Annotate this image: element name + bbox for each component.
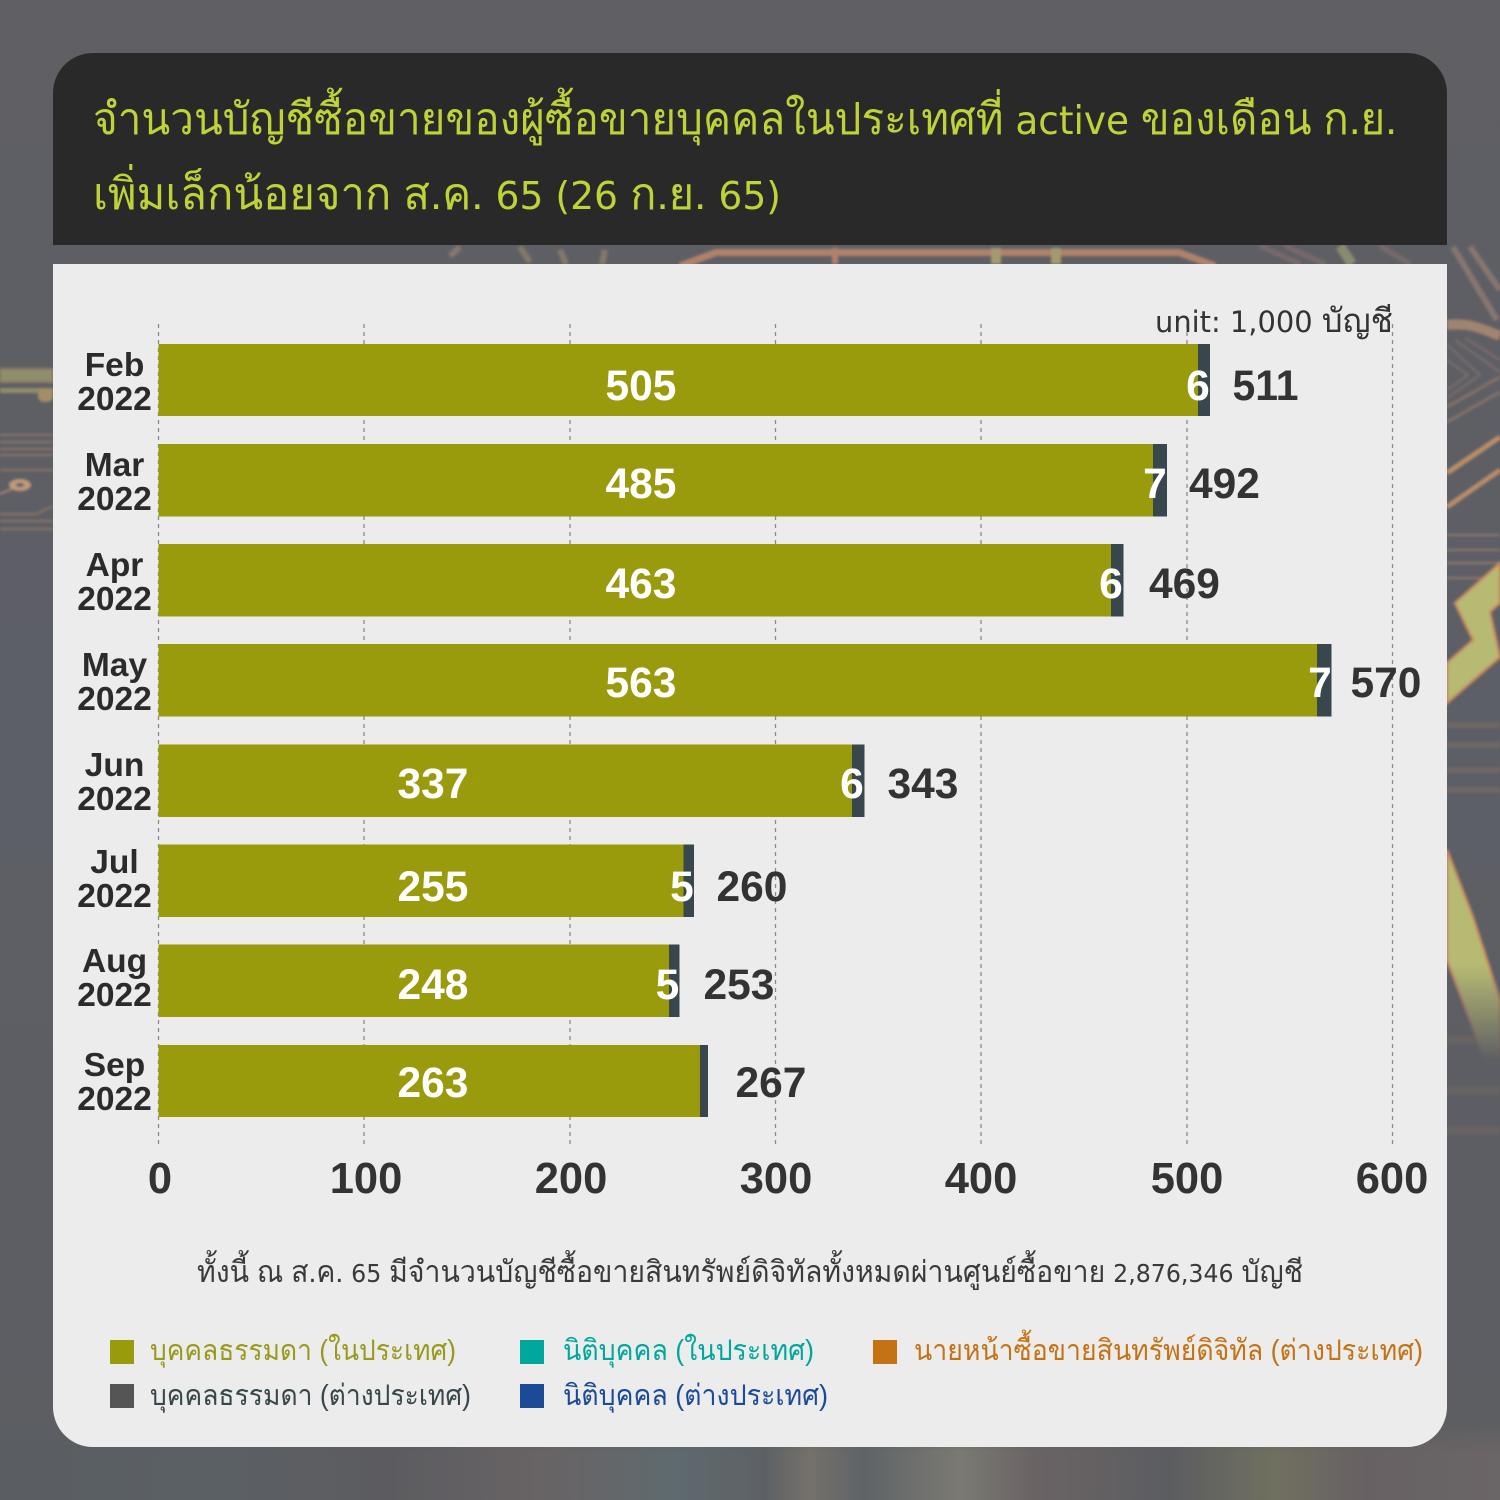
gridlines [158,324,1392,1146]
legend: individual foreign: บุคคลธรรมดา (ต่างประเทศ) [150,1380,471,1413]
x axis labels: 100 [330,1155,402,1203]
row: Apr 2022: 469 [1149,561,1220,608]
row: May 2022: 570 [1351,660,1421,707]
row: Aug 2022: 5 [656,962,679,1009]
row: Apr 2022: 6 [1099,561,1123,608]
x axis labels [148,1155,1428,1203]
row: Mar 2022: Mar [85,447,144,484]
x axis labels: 200 [535,1155,607,1203]
row: Jun 2022: 337 [398,761,468,808]
row: Sep 2022: Sep [84,1047,145,1084]
row: Aug 2022: 2022 [77,977,152,1014]
row: Jul 2022 [77,844,787,917]
row: Feb 2022 [77,344,1298,418]
row: Jun 2022: 343 [888,761,958,808]
row: Sep 2022: 2022 [77,1081,152,1118]
row: Apr 2022 [77,544,1220,618]
row: Jul 2022: Jul [90,844,139,881]
row: Apr 2022: Apr [86,547,143,584]
legend [110,1329,1423,1413]
row: Sep 2022: 267 [736,1060,806,1107]
x axis labels: 600 [1356,1155,1428,1203]
bar chart [77,344,1421,1118]
row: Feb 2022: 505 [606,363,676,410]
x axis labels: 500 [1151,1155,1223,1203]
row: Aug 2022: 253 [704,962,774,1009]
row: May 2022: May [82,647,147,684]
note text: ทั้งนี้ ณ ส.ค. 65 มีจำนวนบัญชีซื้อขายสินทรัพย์ดิจิทัลทั้งหมดผ่านศูนย์ซื้อขาย 2,876,346 บัญชี [197,1250,1303,1290]
legend: digital asset broker: นายหน้าซื้อขายสินทรัพย์ดิจิทัล (ต่างประเทศ) [914,1329,1423,1367]
row: Mar 2022: 492 [1189,461,1260,508]
title line 1: จำนวนบัญชีซื้อขายของผู้ซื้อขายบุคคลในประเทศที่ active ของเดือน ก.ย. [93,87,1397,146]
row: May 2022 [77,644,1421,718]
row: Mar 2022: 485 [606,461,676,508]
row: Sep 2022 [77,1045,806,1118]
row: May 2022: 2022 [77,681,152,718]
title banner [53,53,1447,245]
legend: juristic domestic: นิติบุคคล (ในประเทศ) [563,1333,814,1368]
left circuit traces [0,369,53,529]
row: Jul 2022: 5 [670,864,694,911]
row: May 2022: 7 [1308,660,1332,707]
row: Jun 2022 [77,744,958,818]
row: Jun 2022: 6 [840,761,864,808]
row: Jul 2022: 2022 [77,878,152,915]
row: Feb 2022: Feb [85,347,144,384]
title line 2: เพิ่มเล็กน้อยจาก ส.ค. 65 (26 ก.ย. 65) [93,163,781,219]
row: Aug 2022 [77,943,774,1017]
row: Apr 2022: 463 [606,561,676,608]
row: Jul 2022: 260 [717,864,787,911]
row: Jun 2022: Jun [85,747,144,784]
x axis labels: 300 [740,1155,812,1203]
row: Mar 2022 [77,444,1260,518]
row: Jun 2022: 2022 [77,781,152,818]
row: Sep 2022: 263 [398,1060,468,1107]
unit label: unit: 1,000 บัญชี [1155,302,1393,339]
legend: juristic foreign: นิติบุคคล (ต่างประเทศ) [563,1380,828,1413]
right circuit traces [1447,247,1500,1130]
legend: individual domestic: บุคคลธรรมดา (ในประเทศ) [150,1333,456,1368]
row: Feb 2022: 511 [1232,363,1298,410]
top circuit traces [450,246,1410,266]
chart panel [53,264,1447,1447]
x axis labels: 0 [148,1155,172,1203]
row: Apr 2022: 2022 [77,581,152,618]
row: Mar 2022: 7 [1143,461,1167,508]
row: Mar 2022: 2022 [77,481,152,518]
row: Aug 2022: Aug [82,943,147,980]
row: Feb 2022: 2022 [77,381,152,418]
yellow circuit highlights [1447,563,1500,1060]
row: Jul 2022: 255 [398,864,468,911]
row: May 2022: 563 [606,660,676,707]
row: Aug 2022: 248 [398,962,468,1009]
row: Feb 2022: 6 [1186,363,1210,410]
x axis labels: 400 [945,1155,1017,1203]
